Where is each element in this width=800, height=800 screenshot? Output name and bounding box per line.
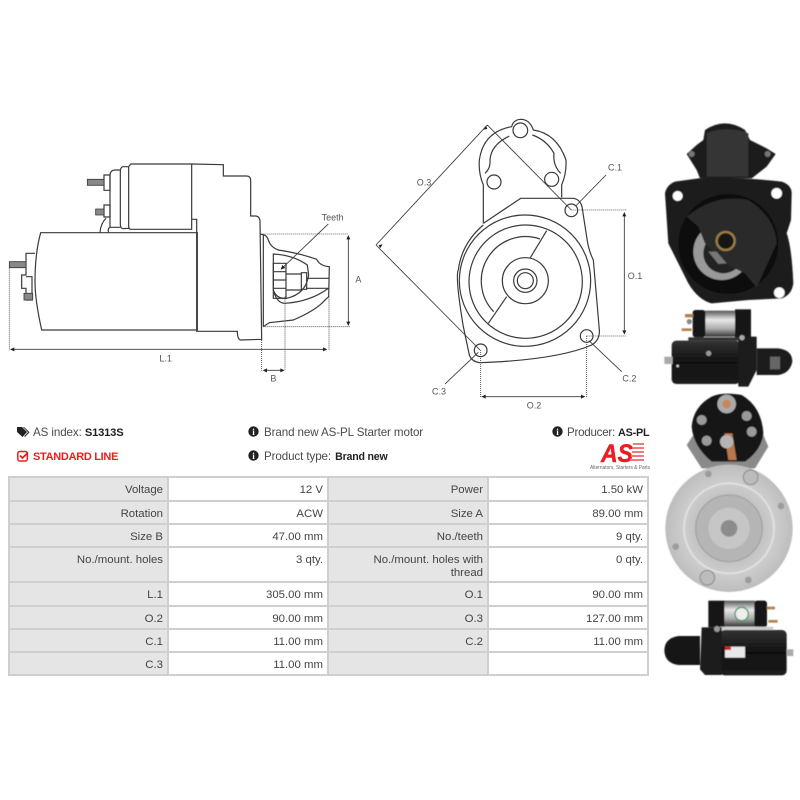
specification table: 127.00 mm (586, 613, 643, 625)
info row: standard line: STANDARD LINE (33, 451, 118, 463)
side view labels (159, 213, 361, 384)
specification table: 90.00 mm (592, 589, 643, 601)
photo: side view left-facing (664, 601, 793, 675)
specification table: ACW (296, 508, 323, 520)
side view labels: Teeth (322, 213, 344, 223)
specification table: Voltage (125, 484, 163, 496)
info: producer: Producer: AS-PL (567, 426, 649, 439)
icon: info (248, 426, 259, 437)
specification table: thread (451, 567, 483, 579)
icon: info: i (252, 451, 255, 461)
specification table: No./mount. holes (77, 554, 163, 566)
specification table (8, 476, 649, 676)
specification table: No./teeth (437, 531, 483, 543)
specification table: O.3 (465, 613, 483, 625)
icon: info: i (556, 427, 559, 437)
side view labels: L.1 (159, 353, 172, 363)
icon: info: i (252, 427, 255, 437)
specification table: Rotation (121, 508, 163, 520)
icon: info (552, 426, 563, 437)
front view labels: O.1 (628, 271, 642, 281)
photo: end view (665, 123, 793, 303)
front view labels (417, 163, 642, 411)
front view labels: C.2 (622, 374, 636, 384)
specification table: 9 qty. (616, 531, 643, 543)
specification table: L.1 (147, 589, 163, 601)
specification table: Power (451, 484, 483, 496)
icon: tags (17, 427, 30, 437)
specification table: O.1 (465, 589, 483, 601)
front view labels: C.1 (608, 163, 622, 173)
side view labels: B (270, 374, 276, 384)
front view labels: O.3 (417, 177, 431, 187)
specification table: 0 qty. (616, 554, 643, 566)
specification table: 47.00 mm (272, 531, 323, 543)
icon: info (248, 450, 259, 461)
specification table: 11.00 mm (273, 636, 323, 648)
specification table: Size A (451, 508, 483, 520)
info row: AS index: AS index: S1313S (33, 426, 123, 439)
specification table: 12 V (300, 484, 323, 496)
icon: checkbox (17, 450, 29, 462)
specification table: 1.50 kW (601, 484, 643, 496)
specification table: C.3 (145, 659, 163, 671)
specification table: 89.00 mm (592, 508, 643, 520)
info: product type: Product type: Brand new (264, 450, 388, 463)
specification table: 11.00 mm (593, 636, 643, 648)
photo: side view right-facing (664, 309, 792, 387)
specification table: Size B (130, 531, 163, 543)
front view labels: C.3 (432, 386, 446, 396)
specification table: 305.00 mm (266, 589, 323, 601)
logo: AS: AS (600, 440, 633, 468)
specification table: 11.00 mm (273, 659, 323, 671)
side view labels: A (355, 275, 361, 285)
specification table: C.2 (465, 636, 483, 648)
photo: terminal and backplate view (665, 394, 793, 592)
front view labels: O.2 (527, 401, 541, 411)
specification table: No./mount. holes with (373, 554, 483, 566)
info: brand new: Brand new AS-PL Starter motor (264, 426, 423, 439)
specification table: O.2 (145, 613, 163, 625)
specification table: 3 qty. (296, 554, 323, 566)
logo: AS: Alternators, Starters & Parts (590, 465, 650, 471)
specification table: C.1 (145, 636, 163, 648)
specification table: 90.00 mm (272, 613, 323, 625)
